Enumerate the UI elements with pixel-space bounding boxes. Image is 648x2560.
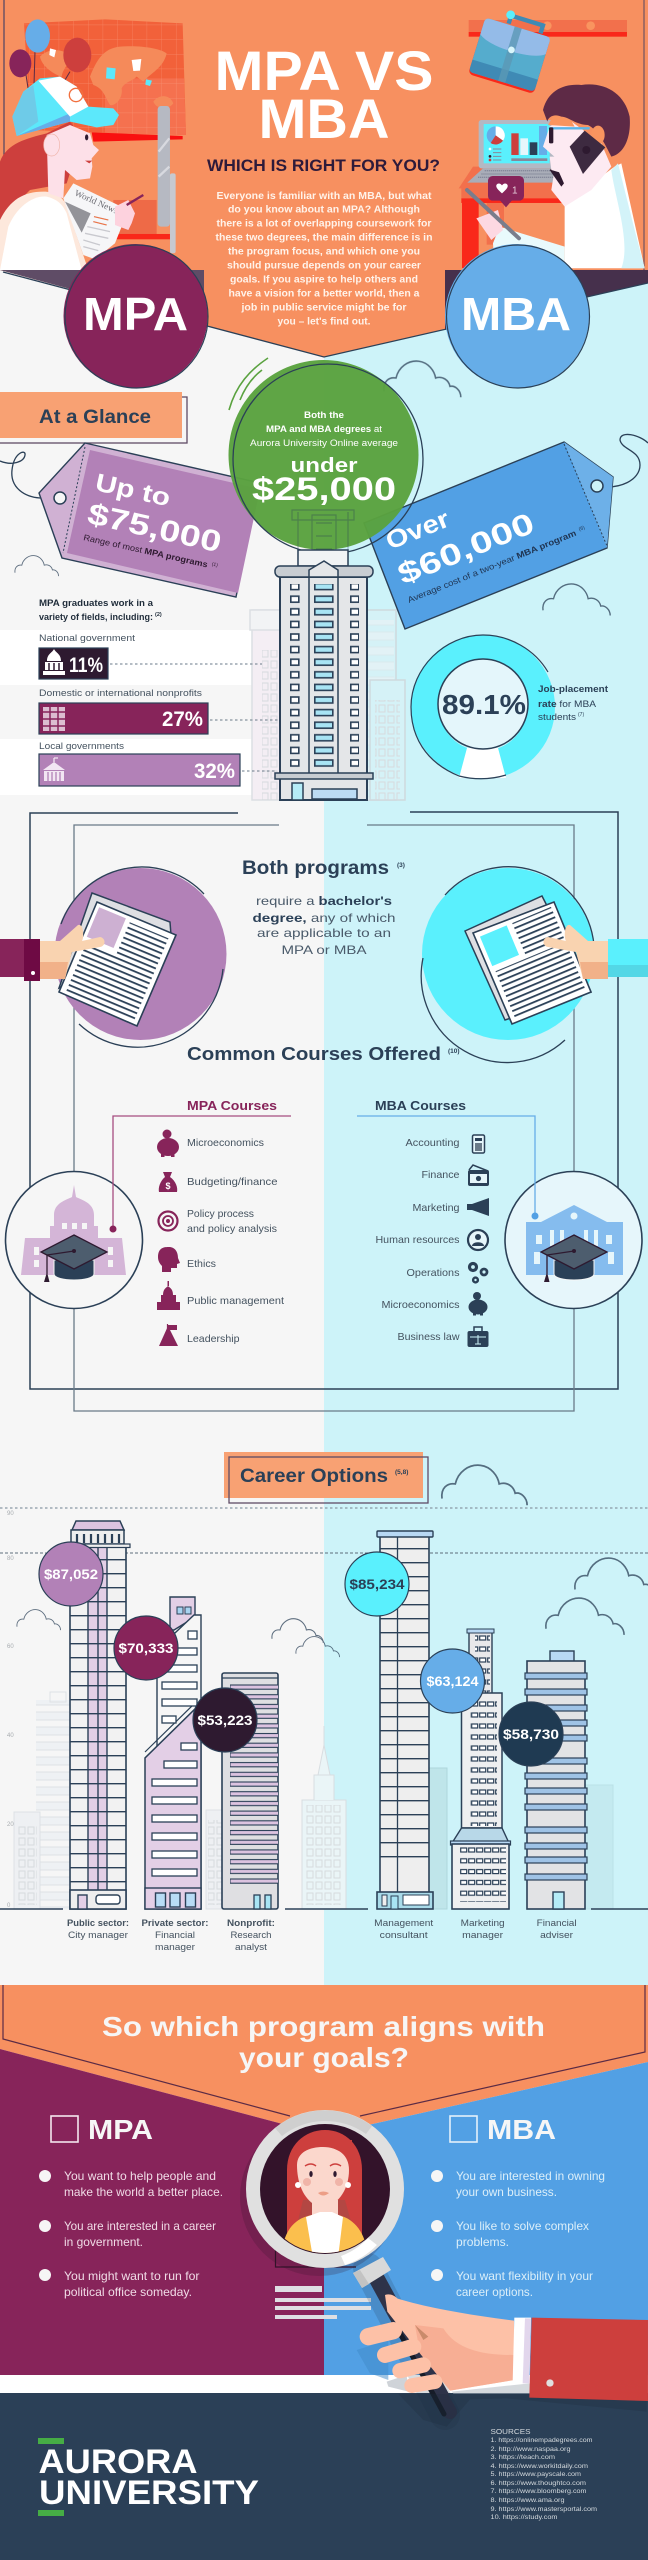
career labels: consultant <box>380 1930 428 1941</box>
column: MPA <box>39 2114 223 2299</box>
salary bubble: $58,730: $58,730 <box>503 1726 559 1742</box>
list: mpa courses: Microeconomics <box>187 1137 264 1149</box>
panel: footer <box>38 2427 597 2521</box>
intro paragraph: you – let's find out. <box>278 316 371 328</box>
heading: both programs: Both programs <box>242 858 389 879</box>
salary bubble: $53,223 <box>193 1688 257 1752</box>
column: MPA: You want to help people and <box>64 2169 216 2183</box>
panel: which program aligns <box>0 1985 648 2560</box>
sources list: 2. http://www.naspaa.org <box>490 2447 570 2453</box>
building: financial manager <box>145 1597 201 1909</box>
salary bubble: $87,052: $87,052 <box>44 1566 98 1582</box>
building: city manager <box>68 1521 130 1909</box>
chart gridlines and axis labels: 80 <box>7 1556 14 1562</box>
list: mpa courses: and policy analysis <box>187 1223 277 1235</box>
price tag: up to $75,000: $75,000 <box>84 498 224 559</box>
heading: so which program aligns: So which program aligns with <box>102 2011 545 2042</box>
bar: national government 11%: National government <box>39 633 135 643</box>
donut chart: 89.1% <box>411 635 608 779</box>
column: MPA: political office someday. <box>64 2285 192 2299</box>
sources list: 7. https://www.bloomberg.com <box>490 2489 586 2495</box>
list: mpa courses: Leadership <box>187 1333 240 1345</box>
illustration: man on phone with laptop <box>459 4 645 268</box>
sources list: SOURCES <box>490 2427 530 2436</box>
icon: gears <box>470 1264 487 1282</box>
panel: career options <box>0 1452 648 1953</box>
sources list <box>490 2427 597 2521</box>
heading: so which program aligns <box>102 2011 545 2073</box>
heading: mpa vs mba title: MBA <box>258 87 390 150</box>
heading: at a glance: At a Glance <box>39 407 151 428</box>
icon: briefcase with scales <box>468 1327 488 1347</box>
illustration: graduation building, right <box>505 1172 642 1308</box>
intro paragraph: have a vision for a better world, then a <box>228 288 420 300</box>
bar: local governments 32%: 32% <box>194 760 235 783</box>
intro paragraph: goals. If you aspire to help others and <box>230 274 418 286</box>
sources list: 8. https://www.ama.org <box>490 2498 564 2504</box>
career labels: manager <box>462 1930 503 1941</box>
chart heading: (2) <box>155 612 162 618</box>
price tag: over $60,000 <box>364 434 648 629</box>
illustration: woman reading newspaper <box>0 19 186 270</box>
illustration: man on phone with laptop: 1 <box>512 185 518 196</box>
price tag: up to $75,000 <box>0 443 260 597</box>
price tag: over $60,000: Average cost of a two-year MBA program <box>406 528 578 605</box>
bar: domestic or international nonprofits 27% <box>39 688 280 734</box>
decorative background buildings <box>250 610 405 800</box>
requirement text: degree, any of which <box>252 911 396 925</box>
salary bubble: $70,333 <box>114 1616 178 1680</box>
donut caption: (7) <box>578 712 584 718</box>
donut caption <box>538 684 608 722</box>
donut caption: Job-placement <box>538 684 608 694</box>
icon: money bag: $ <box>165 1181 171 1191</box>
requirement text <box>252 894 396 957</box>
callout: under $25,000: Aurora University Online average <box>250 438 398 448</box>
price tag: up to $75,000: Up to <box>93 469 173 512</box>
subtitle: WHICH IS RIGHT FOR YOU? <box>207 156 440 175</box>
price tag: over $60,000: Over <box>382 505 454 556</box>
heading: mpa vs mba title: MPA VS <box>214 39 434 102</box>
icon: person badge <box>468 1230 488 1250</box>
sources list: 9. https://www.mastersportal.com <box>490 2507 597 2513</box>
chart: mpa graduate fields <box>39 598 280 786</box>
column: MBA: your own business. <box>456 2185 557 2199</box>
career labels: Research <box>230 1930 272 1941</box>
heading: common courses offered: (10) <box>448 1048 460 1055</box>
list: mpa courses <box>110 1098 291 1346</box>
requirement text: require a bachelor's <box>256 894 392 908</box>
chart gridlines and axis labels: 20 <box>7 1822 14 1828</box>
chart heading: variety of fields, including: <box>39 612 153 622</box>
intro paragraph: these two degrees, the main difference is in <box>216 232 432 244</box>
salary bubble: $70,333: $70,333 <box>118 1640 174 1656</box>
list: mba courses: Operations <box>406 1267 460 1279</box>
career labels: Financial <box>537 1918 577 1929</box>
footer background <box>0 2393 648 2560</box>
building: management consultant <box>377 1531 433 1909</box>
salary bubble: $58,730 <box>499 1702 563 1766</box>
illustration: hand with paper, left <box>0 867 226 1047</box>
column: MBA: MBA <box>487 2114 556 2145</box>
chart gridlines and axis labels <box>0 1508 648 1909</box>
intro paragraph: job in public service might be for <box>240 302 406 314</box>
sources list: 4. https://www.workitdaily.com <box>490 2464 588 2470</box>
illustration: hand with paper, right <box>421 867 648 1063</box>
illustration: hand holding magnifier <box>357 2294 648 2427</box>
bar: national government 11%: 11% <box>69 654 103 677</box>
bar: local governments 32%: Local governments <box>39 741 124 751</box>
heading: so which program aligns: your goals? <box>239 2042 409 2073</box>
icon: capitol <box>157 1281 180 1310</box>
badge: MPA: MPA <box>83 288 188 340</box>
chart heading <box>39 598 162 622</box>
frame lines <box>30 812 618 1411</box>
column: MBA: You are interested in owning <box>456 2169 605 2183</box>
callout: under $25,000 <box>228 358 423 554</box>
column: MPA: in government. <box>64 2235 143 2249</box>
chart gridlines and axis labels: 0 <box>7 1903 11 1909</box>
sources list: 3. https://teach.com <box>490 2455 555 2461</box>
list: mba courses: Marketing <box>412 1202 460 1214</box>
icon: target <box>158 1212 178 1230</box>
requirement text: are applicable to an <box>257 926 391 940</box>
intro paragraph <box>216 190 432 328</box>
chart background bands <box>0 630 324 795</box>
salary bubble: $63,124: $63,124 <box>426 1673 479 1689</box>
illustration: graduation building, left <box>6 1172 142 1308</box>
list: mpa courses: Policy process <box>187 1208 254 1220</box>
heading: career options: Career Options <box>240 1466 388 1487</box>
logo: aurora university: AURORA <box>38 2443 198 2481</box>
bottom band <box>0 2375 648 2393</box>
column: MBA: career options. <box>456 2285 533 2299</box>
career labels: analyst <box>235 1942 267 1953</box>
intro paragraph: the program focus, and which one you <box>228 246 420 258</box>
building: research analyst <box>222 1673 278 1909</box>
donut caption: rate for MBA <box>538 699 596 709</box>
chart gridlines and axis labels: 60 <box>7 1644 14 1650</box>
icon: calculator <box>472 1135 484 1153</box>
list: mba courses: Accounting <box>406 1137 460 1149</box>
heading: at a glance <box>0 392 187 443</box>
sources list: 5. https://www.payscale.com <box>490 2472 581 2478</box>
clouds <box>15 361 610 616</box>
building: marketing manager <box>450 1629 510 1909</box>
column: MBA: problems. <box>456 2235 509 2249</box>
sources list: 10. https://study.com <box>490 2515 558 2521</box>
heading: common courses offered: Common Courses Offered <box>187 1044 441 1064</box>
decorative background skyline <box>14 1692 613 1909</box>
career labels: City manager <box>68 1930 128 1941</box>
icon: mountain flag <box>159 1324 178 1346</box>
bar: national government 11% <box>39 633 262 679</box>
badge: MBA <box>445 244 590 388</box>
illustration: woman reading newspaper: World News <box>73 188 120 216</box>
callout: under $25,000: under <box>290 455 358 477</box>
bar: local governments 32% <box>39 741 277 786</box>
logo: aurora university <box>38 2438 259 2516</box>
column: MPA: MPA <box>88 2114 153 2145</box>
panel: both programs <box>0 858 648 1063</box>
intro paragraph: Everyone is familiar with an MBA, but what <box>216 190 432 202</box>
list: mba courses: Business law <box>398 1331 460 1343</box>
list: mpa courses: Budgeting/finance <box>187 1176 278 1188</box>
salary bubble: $87,052 <box>39 1542 103 1606</box>
panel: common courses <box>6 1044 642 1347</box>
panel: header <box>0 0 648 357</box>
list: mba courses: Microeconomics <box>382 1299 460 1311</box>
column: MPA: make the world a better place. <box>64 2185 223 2199</box>
list: mba courses: MBA Courses <box>375 1098 466 1113</box>
header fold shadows <box>0 270 648 357</box>
career labels: Public sector: <box>67 1918 129 1929</box>
donut caption: students <box>538 712 577 722</box>
icon: piggy bank <box>468 1292 488 1316</box>
career labels: Nonprofit: <box>227 1918 275 1929</box>
requirement text: MPA or MBA <box>282 943 366 957</box>
donut chart: 89.1%: 89.1% <box>442 689 526 720</box>
clouds <box>17 1465 648 1657</box>
icon: megaphone <box>467 1198 489 1216</box>
icon: money bag <box>159 1172 177 1192</box>
intro paragraph: do you know about an MPA? Although <box>228 204 420 216</box>
bar: domestic or international nonprofits 27%: 27% <box>162 708 203 731</box>
illustration: magnifying glass with candidate <box>240 2110 450 2415</box>
badge: MPA <box>64 244 208 388</box>
salary bubble: $85,234: $85,234 <box>350 1576 405 1592</box>
logo: aurora university: UNIVERSITY <box>39 2474 259 2512</box>
career labels: Marketing <box>461 1918 505 1929</box>
chart gridlines and axis labels: 40 <box>7 1733 14 1739</box>
heading: both programs: (3) <box>397 862 405 869</box>
panel: at a glance <box>0 358 648 800</box>
list: mba courses: Finance <box>422 1169 460 1181</box>
salary bubble: $85,234 <box>345 1552 409 1616</box>
list: mba courses <box>357 1098 538 1347</box>
list: mpa courses: Ethics <box>187 1258 216 1270</box>
callout: under $25,000: MPA and MBA degrees at <box>266 424 383 434</box>
sources list: 1. https://onlinempadegrees.com <box>490 2438 592 2444</box>
intro paragraph: there is a lot of overlapping coursework for <box>216 218 432 230</box>
candidate portrait <box>284 2130 364 2253</box>
career labels: Private sector: <box>142 1918 208 1929</box>
column: MBA <box>431 2114 605 2299</box>
chart heading: MPA graduates work in a <box>39 598 154 608</box>
career labels <box>67 1918 577 1953</box>
icon: piggy bank <box>157 1130 179 1157</box>
callout: under $25,000: $25,000 <box>252 471 396 507</box>
career labels: Financial <box>155 1930 195 1941</box>
column: MBA: You want flexibility in your <box>456 2269 593 2283</box>
career labels: Management <box>374 1918 434 1929</box>
price tag: up to $75,000: (1) <box>211 562 219 569</box>
heading: mpa vs mba title <box>214 39 434 150</box>
salary bubble: $63,124 <box>420 1649 484 1713</box>
resume lines behind magnifier <box>275 2240 371 2319</box>
career labels: manager <box>155 1942 195 1953</box>
column: MPA: You are interested in a career <box>64 2219 216 2233</box>
price tag: over $60,000: $60,000 <box>393 507 539 591</box>
salary bubble: $53,223: $53,223 <box>198 1712 253 1728</box>
icon: head with puzzle <box>158 1247 180 1272</box>
heading: career options: (5,8) <box>395 1469 408 1476</box>
column: MPA: You might want to run for <box>64 2269 200 2283</box>
illustration: central building <box>275 510 373 800</box>
list: mba courses: Human resources <box>376 1234 460 1246</box>
icon: cash box <box>468 1165 489 1186</box>
chart gridlines and axis labels: 90 <box>7 1511 14 1517</box>
ground line <box>0 1908 648 1910</box>
badge: MBA: MBA <box>461 288 571 340</box>
intro paragraph: should pursue depends on your career <box>227 260 421 272</box>
heading: career options <box>224 1452 428 1503</box>
callout: under $25,000: Both the <box>304 410 344 420</box>
page background <box>0 260 648 1990</box>
price tag: over $60,000: (6) <box>578 525 586 533</box>
bar: domestic or international nonprofits 27%: Domestic or international nonprofits <box>39 688 202 698</box>
column: MBA: You like to solve complex <box>456 2219 589 2233</box>
list: mpa courses: MPA Courses <box>187 1098 277 1113</box>
list: mpa courses: Public management <box>187 1295 284 1307</box>
career labels: adviser <box>540 1930 573 1941</box>
sources list: 6. https://www.thoughtco.com <box>490 2481 586 2487</box>
building: financial adviser <box>525 1651 587 1909</box>
price tag: up to $75,000: Range of most MPA programs <box>83 532 209 570</box>
